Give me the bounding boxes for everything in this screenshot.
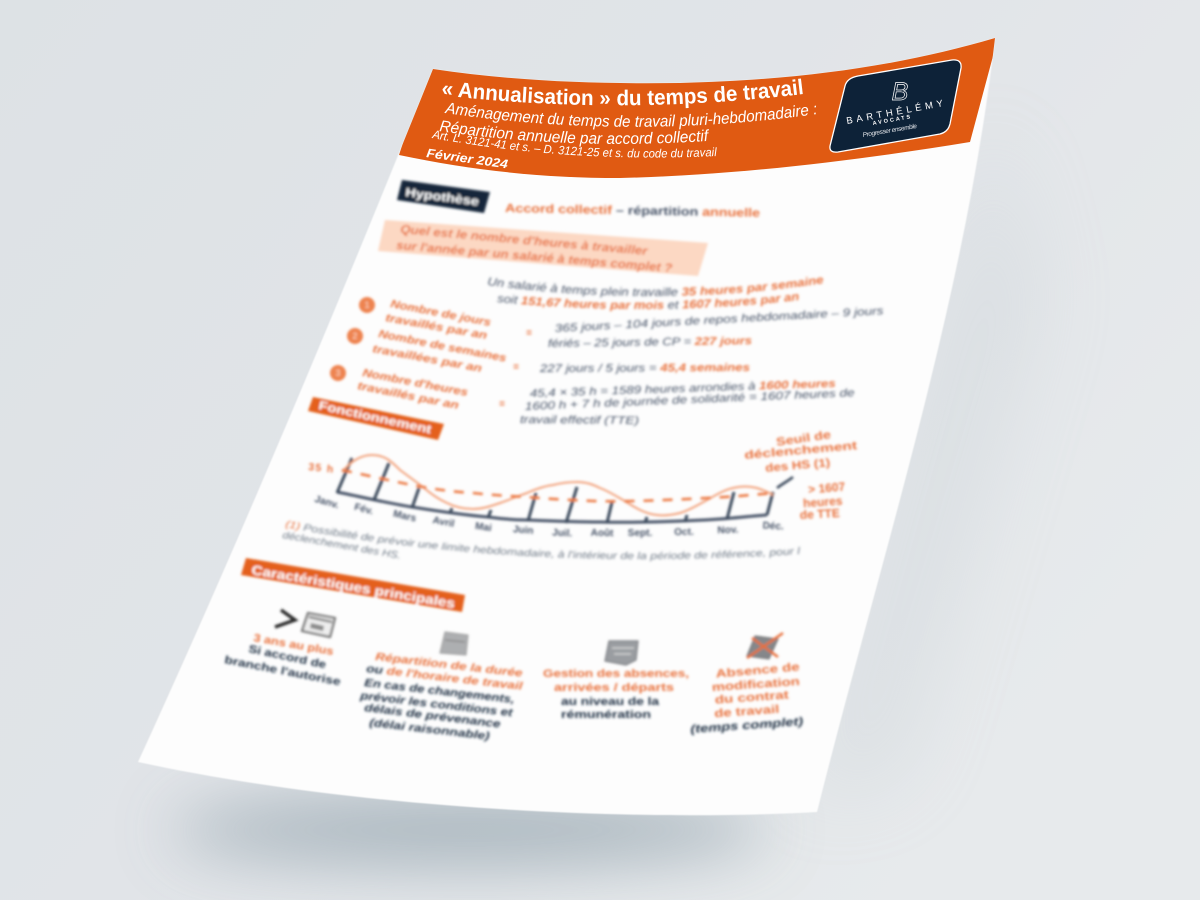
annual hours label: de TTE <box>799 506 840 522</box>
step 1: fériés – 25 jours de CP = 227 jours <box>548 335 752 350</box>
subtitle line 2: Répartition annuelle par accord collectif <box>440 120 709 147</box>
logo name: BARTHÉLÉMY <box>846 98 945 127</box>
step 2: 2 <box>352 331 358 341</box>
characteristic 1: 3 ans au plus <box>252 632 334 658</box>
annual hours label: > 1607 <box>808 479 846 497</box>
characteristic 2: délais de prévenance <box>364 702 501 731</box>
icon: absence calendar <box>605 641 638 665</box>
intro paragraph <box>486 276 825 313</box>
step 2: = <box>513 362 519 373</box>
35 h threshold dashed line <box>342 470 773 501</box>
step 3: 1600 h + 7 h de journée de solidarité = 1607 heures de <box>525 387 855 413</box>
step 3: 45,4 × 35 h = 1589 heures arrondies à 1600 heures <box>530 378 836 400</box>
characteristic 3: arrivées / départs <box>554 682 674 694</box>
step 3: travaillés par an <box>356 380 460 412</box>
badge: Hypothèse <box>397 180 490 213</box>
characteristic 4: du contrat <box>714 689 789 707</box>
axis <box>337 492 767 522</box>
intro paragraph: soit 151,67 heures par mois et 1607 heures par an <box>496 292 800 313</box>
badge: Fonctionnement: Fonctionnement <box>317 398 433 436</box>
characteristic 3: au niveau de la <box>561 696 660 708</box>
document body <box>223 178 884 744</box>
step 1: travaillés par an <box>384 312 488 342</box>
icon: greater than calendar <box>275 610 335 637</box>
icon: contract crossed out <box>747 633 783 659</box>
timeline chart <box>308 455 793 540</box>
month labels: Août <box>591 528 614 539</box>
step 3: Nombre d'heures <box>361 367 469 399</box>
subtitle line 1: Aménagement du temps de travail pluri-hebdomadaire : <box>444 102 816 130</box>
month labels: Oct. <box>674 527 694 538</box>
characteristic 1 <box>223 632 342 688</box>
characteristic 2 <box>358 651 524 743</box>
question box: sur l'année par un salarié à temps complet ? <box>396 238 674 275</box>
characteristic 4: de travail <box>714 704 780 720</box>
month labels: Juil. <box>552 527 573 540</box>
characteristic 3 <box>543 668 689 721</box>
footnote: déclenchement des HS. <box>281 530 402 562</box>
month labels: Janv. <box>313 494 340 511</box>
characteristic 4 <box>690 661 804 736</box>
date: Février 2024 <box>426 146 509 171</box>
badge: Caractéristiques principales <box>241 558 465 612</box>
logo <box>830 60 961 152</box>
characteristic 2: (délai raisonnable) <box>369 717 491 743</box>
month labels: Fév. <box>353 502 375 517</box>
header band <box>399 30 1000 178</box>
step 2: Nombre de semaines <box>377 328 507 365</box>
step 2: travaillées par an <box>371 343 483 375</box>
step 2: 227 jours / 5 jours = 45,4 semaines <box>539 362 750 375</box>
working-time wave <box>342 455 773 515</box>
threshold label <box>744 429 858 475</box>
threshold label: des HS (1) <box>765 457 831 475</box>
logo monogram: B <box>892 78 908 106</box>
footnote <box>281 519 802 562</box>
characteristic 3: Gestion des absences, <box>543 668 689 680</box>
month labels: Sept. <box>628 528 652 539</box>
page drop shadow <box>170 120 1040 864</box>
month labels: Nov. <box>717 525 739 536</box>
month labels: Avril <box>432 515 455 530</box>
footnote: (1) Possibilité de prévoir une limite hebdomadaire, à l'intérieur de la période de référence, pour le <box>284 519 802 562</box>
intro paragraph: Un salarié à temps plein travaille 35 heures par semaine <box>486 276 825 298</box>
header text <box>426 78 816 171</box>
badge: Hypothèse: Hypothèse <box>405 185 480 209</box>
badge: Fonctionnement <box>308 397 444 440</box>
characteristic 2: Répartition de la durée <box>375 651 523 680</box>
characteristic 2: ou de l'horaire de travail <box>366 663 524 693</box>
characteristic 1: branche l'autorise <box>223 654 342 688</box>
step 1: 1 <box>364 300 370 310</box>
title: « Annualisation » du temps de travail <box>442 78 803 108</box>
step 3: travail effectif (TTE) <box>520 414 639 427</box>
threshold label: Seuil de <box>776 429 832 449</box>
document page <box>138 38 995 815</box>
step 3 <box>330 365 855 427</box>
month ticks <box>337 458 773 523</box>
step 2 <box>347 328 750 375</box>
icon: document schedule <box>440 632 468 655</box>
month labels: Déc. <box>762 520 784 533</box>
threshold label: déclenchement <box>744 440 858 462</box>
legal references: Art. L. 3121-41 et s. – D. 3121-25 et s. du code du travail <box>432 130 717 158</box>
characteristic 2: En cas de changements, <box>364 677 515 706</box>
step 3: 3 <box>335 368 341 378</box>
annual hours label <box>799 479 846 522</box>
month labels: Mars <box>392 509 418 525</box>
characteristic 3: rémunération <box>561 709 651 721</box>
characteristic 2: prévoir les conditions et <box>358 690 515 719</box>
step 1: 365 jours – 104 jours de repos hebdomadaire – 9 jours <box>555 305 884 335</box>
month labels: Mai <box>474 521 493 534</box>
logo tagline: Progresser ensemble <box>862 123 918 139</box>
month labels: Juin <box>512 524 534 537</box>
step 1: = <box>526 328 532 339</box>
35 h label: 35 h <box>308 461 334 476</box>
characteristic 1: Si accord de <box>247 643 327 671</box>
step 3: = <box>499 399 505 410</box>
logo avocats: AVOCATS <box>872 114 911 127</box>
step 1 <box>359 297 884 350</box>
question box: Quel est le nombre d'heures à travailler <box>400 222 649 258</box>
characteristic 4: (temps complet) <box>690 716 804 736</box>
annual hours label: heures <box>803 494 843 510</box>
step 1: Nombre de jours <box>389 298 492 329</box>
hypothesis statement: Accord collectif – répartition annuelle <box>505 201 761 220</box>
question box <box>378 220 708 276</box>
badge: Caractéristiques principales: Caractéristiques principales <box>251 562 456 611</box>
threshold arrow <box>777 477 793 488</box>
month labels <box>313 494 784 540</box>
characteristic 4: Absence de <box>715 661 800 681</box>
characteristic 4: modification <box>711 676 800 694</box>
